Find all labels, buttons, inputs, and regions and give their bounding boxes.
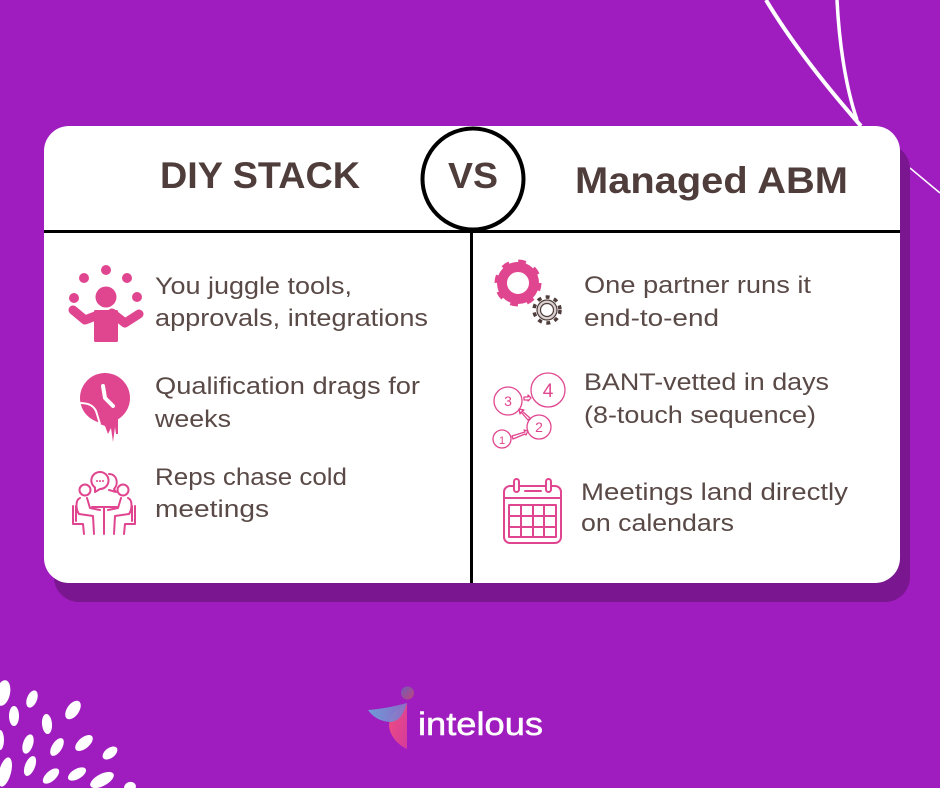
card shadow xyxy=(54,144,910,602)
text: one partner xyxy=(584,272,811,332)
comparison card xyxy=(44,126,900,583)
text: qualification drags: weeks xyxy=(154,406,231,433)
text: one partner: end-to-end xyxy=(584,305,719,332)
text: meetings land: Meetings land directly xyxy=(581,479,848,506)
icon: gears xyxy=(497,262,560,323)
decorative white curves, top right xyxy=(766,0,940,193)
icon: melting clock xyxy=(79,373,130,442)
icon: numbered steps: 4 xyxy=(543,381,554,402)
text: BANT-vetted xyxy=(584,369,829,429)
text: qualification drags xyxy=(154,373,420,433)
logo: intelous xyxy=(368,686,543,749)
text: qualification drags: Qualification drags for xyxy=(155,373,420,400)
heading: DIY STACK: DIY STACK xyxy=(160,155,360,196)
icon: calendar xyxy=(504,479,561,543)
decorative white brush dots, bottom left xyxy=(0,679,137,788)
heading: Managed ABM: Managed ABM xyxy=(575,160,848,201)
icon: numbered steps: 1 xyxy=(499,435,505,447)
text: BANT-vetted: (8-touch sequence) xyxy=(584,402,816,429)
text: one partner: One partner runs it xyxy=(584,272,811,299)
text: you juggle tools: You juggle tools, xyxy=(155,273,352,300)
text: reps chase cold meetings: meetings xyxy=(155,496,269,523)
text: reps chase cold meetings: Reps chase cold xyxy=(155,464,347,491)
logo: intelous: intelous xyxy=(418,706,543,742)
icon: numbered steps: 2 xyxy=(535,419,543,435)
icon: juggling person xyxy=(69,265,142,342)
text: you juggle tools: approvals, integrations xyxy=(155,305,428,332)
text: meetings land: on calendars xyxy=(581,510,734,537)
icon: meeting at table xyxy=(73,472,135,534)
text: BANT-vetted: BANT-vetted in days xyxy=(584,369,829,396)
text: reps chase cold meetings xyxy=(155,464,347,523)
text: you juggle tools xyxy=(155,273,428,332)
VS badge: VS xyxy=(448,155,498,196)
icon: numbered steps: 3 xyxy=(504,393,512,409)
icon: numbered steps xyxy=(493,373,565,448)
text: meetings land xyxy=(581,479,848,537)
VS badge xyxy=(422,128,524,230)
